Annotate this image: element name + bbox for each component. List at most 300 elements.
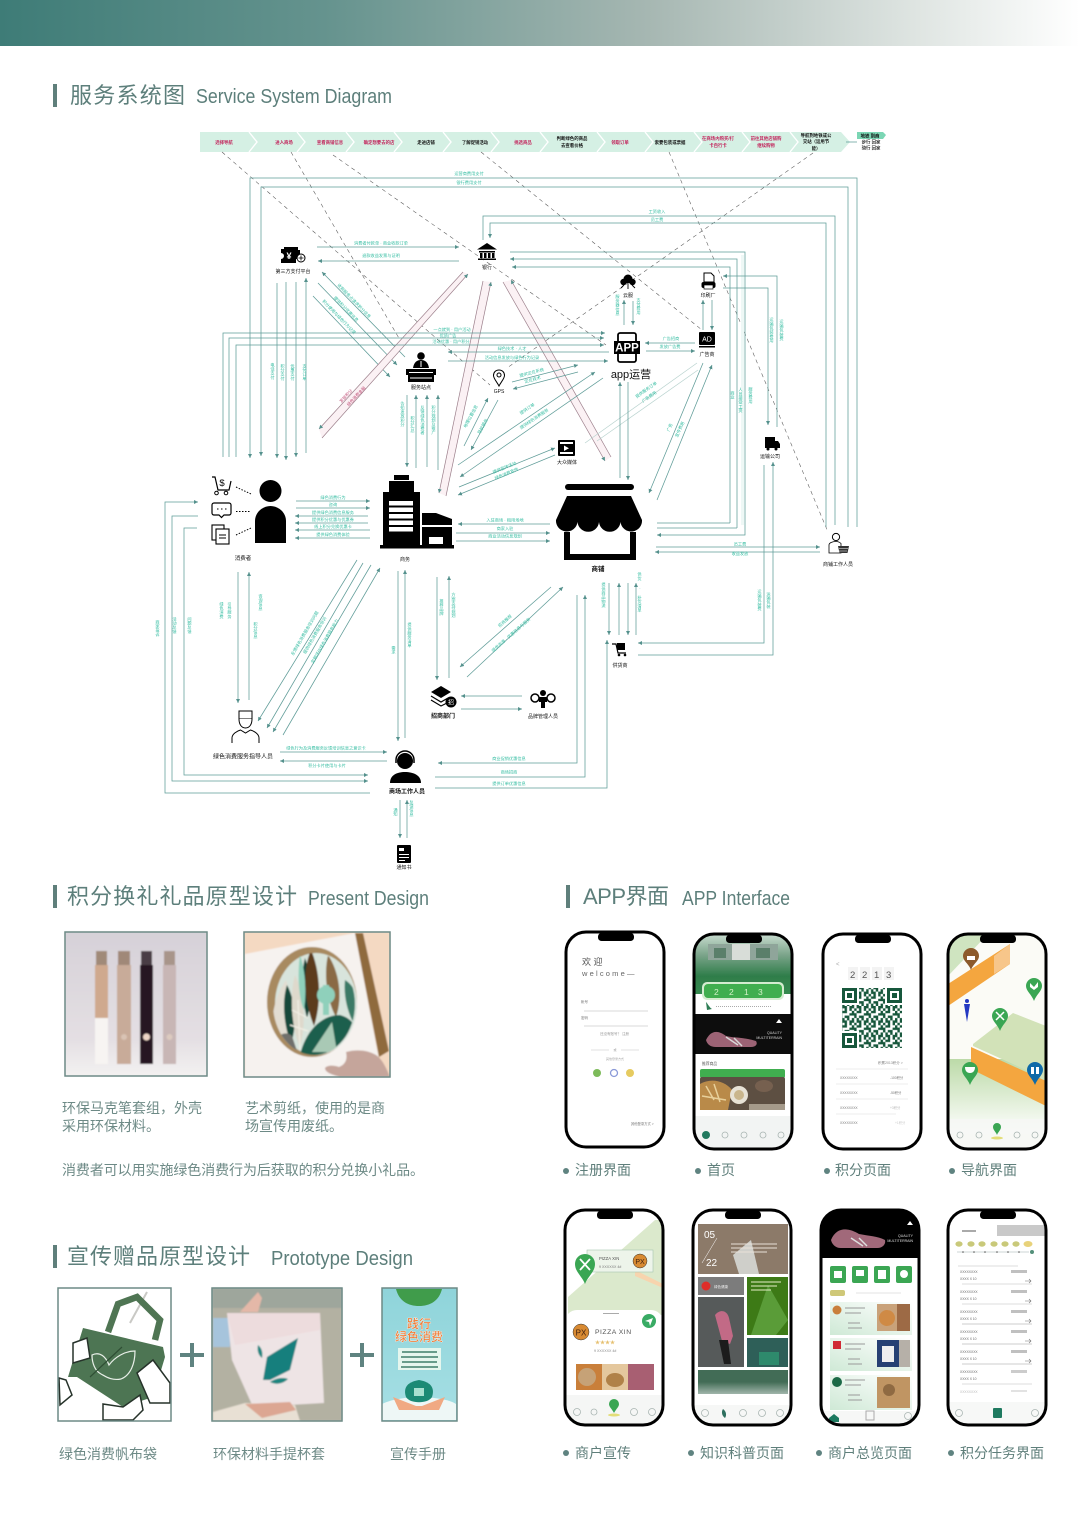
- arrows: consumer and mall: 提供积分优惠与优惠券: [312, 516, 355, 523]
- heading: present design: Present Design: [308, 888, 429, 910]
- brochure title: 践行: [407, 1316, 431, 1331]
- arrows: GPS links: 导航服务: [476, 417, 490, 435]
- icon: logistics truck: 运输公司: [760, 453, 780, 460]
- arrows: bank to right side loop: [510, 252, 754, 535]
- task rows: [958, 1266, 1032, 1394]
- task rows: XXXXXXXX: [960, 1270, 978, 1274]
- arrows: GPS links: [462, 365, 578, 450]
- arrows: shop and shop staff: 收益发放: [732, 550, 749, 557]
- arrows: consumer and green guide: 积分信息: [253, 620, 258, 639]
- arrows: shop and shop staff: 员工费: [734, 540, 746, 548]
- arrows: mall and investment dept: [437, 576, 456, 680]
- bag handles: [108, 1297, 160, 1340]
- arrows: app to service point: [448, 345, 609, 361]
- icon: app operations: [611, 333, 651, 381]
- icon: consumer group: 消费者: [235, 554, 252, 562]
- map pins: [962, 948, 1043, 1085]
- heading: prototype design: 宣传赠品原型设计: [67, 1244, 250, 1269]
- customer journey chevron band: 去查看价格: [561, 142, 584, 149]
- leaf print: [263, 1338, 298, 1380]
- arrows: shop and supplier: 提供商品物流: [601, 581, 606, 609]
- long routes: staff to bank, app and consumer: 银行费用支付: [456, 179, 482, 186]
- paper frame ring: [267, 947, 357, 1057]
- caption: merchant promotion: 商户宣传: [575, 1445, 631, 1461]
- arrows: third party pay to service point: 提供积分优惠信息: [332, 294, 360, 323]
- arrows: consumer and mall: 提供绿色消费信息服务: [312, 509, 355, 516]
- customer journey chevron band: 能）: [812, 145, 820, 151]
- phone: merchant promotion: [565, 1210, 663, 1425]
- phone: points page: XXXXXXXX: [840, 1076, 858, 1080]
- icon: mall staff with headset: 商场工作人员: [389, 788, 425, 796]
- icon: supplier cart: 供货商: [612, 662, 628, 669]
- hand: [325, 1050, 390, 1077]
- icon: bank: [477, 243, 497, 271]
- icon: shop staff: [823, 533, 853, 568]
- heading: present design: [53, 884, 429, 910]
- arrows: green guide and merchant staff: [280, 744, 387, 769]
- arrows: mall and merchant staff: 需求: [391, 645, 396, 655]
- icon: GPS pin: GPS: [494, 389, 505, 395]
- icon: documents: [212, 525, 229, 544]
- top gradient banner: [0, 0, 1080, 46]
- photo: canvas bag: [58, 1288, 171, 1421]
- arrows: mall to app and media: 提供订单: [518, 401, 536, 416]
- arrows: merchant staff to shop: [435, 595, 607, 788]
- icon: cloud server: [620, 274, 636, 299]
- arrows: service point to mall: 反馈绿色消费者: [420, 404, 426, 436]
- arrows: consumer and green guide: 引导服务: [227, 600, 232, 620]
- task rows: XXXX X 10: [960, 1357, 977, 1361]
- caption: knowledge page: 知识科普页面: [700, 1445, 784, 1461]
- category tiles: [830, 1266, 912, 1283]
- arrows: mall to app and media: [458, 372, 603, 495]
- text block: marker pen description: [62, 1100, 202, 1134]
- arrows: shop and investment dept: [460, 587, 563, 677]
- icon: investment department: 招: [448, 698, 454, 706]
- caption: brochure: 宣传手册: [390, 1446, 446, 1462]
- arrows: mall and green guide: 定期评估绿色消费服务能力: [309, 618, 340, 665]
- icon: third party payment: 第三方支付平台: [275, 268, 311, 275]
- arrows: green guide and merchant staff: 积分卡片使用与卡片: [308, 762, 346, 769]
- phone: merchant promotion: PX: [635, 1259, 645, 1266]
- arrows: mall and green guide: [258, 560, 380, 735]
- arrows: consumer and mall: 绿色消费行为: [320, 494, 346, 501]
- leaf logo: [92, 1351, 135, 1379]
- icon: chat bubble: [212, 503, 231, 518]
- arrows: app to service point: 活动信息发放与绿色行为记录: [485, 354, 539, 361]
- text block: marker pen description: 采用环保材料。: [62, 1118, 160, 1134]
- heading: service system diagram: [53, 83, 392, 108]
- arrows: consumer to merchant staff loop: 问题反馈: [187, 615, 192, 635]
- icon: third party payment: ¥: [286, 251, 292, 261]
- arrows: third party pay to consumer: 电话支付: [270, 361, 276, 381]
- phone: merchant promotion: ★★★★: [595, 1340, 615, 1346]
- phone: merchant overview: [821, 1210, 919, 1425]
- arrows: merchant staff and notice: 通知: [393, 806, 398, 818]
- text block: marker pen description: 环保马克笔套组，外壳: [62, 1100, 202, 1116]
- fern leaves: [272, 950, 360, 1055]
- phone: home screen: 推荐商品: [702, 1061, 717, 1066]
- merchant rows: [830, 1302, 912, 1410]
- icon: notice document: [396, 845, 412, 871]
- journey legend: [846, 132, 886, 152]
- icon: shop storefront: 商铺: [592, 564, 605, 573]
- arrows: bank to right side loop: 服务费用: [748, 386, 754, 405]
- arrows: printer, cloud and truck: 服务器信息: [615, 294, 620, 316]
- arrows: mall to app and media: 提供宣传活动: [491, 460, 517, 476]
- icon: consumer group: [212, 477, 286, 562]
- phone: register screen: [566, 932, 664, 1147]
- arrows: service point to mall: 积分规划及推广: [431, 404, 436, 436]
- phone: knowledge page: 05: [704, 1230, 716, 1241]
- arrows: mall and merchant staff: [391, 570, 412, 741]
- arrows: ad to shop and mall: 提供服务订单: [634, 380, 658, 400]
- arrows: bank to shop (pink): [503, 280, 611, 461]
- task rows: XXXXXXXX: [960, 1350, 978, 1354]
- icon: advertiser: AD: [702, 336, 712, 344]
- arrows: app and ad: 广告招商: [663, 335, 679, 342]
- photo: eco marker pen set: [65, 932, 207, 1076]
- arrows: consumer and green guide: [219, 572, 264, 703]
- customer journey chevron band: 前往其他店铺购: [751, 135, 782, 142]
- phone: points page: +3积分: [890, 1105, 901, 1110]
- arrows: merchant staff and notice: [393, 798, 414, 838]
- phone: home screen: QUALITY: [767, 1031, 783, 1035]
- journey legend: 步行 回家: [862, 138, 881, 146]
- arrows: shop and supplier: 供货 · 补货清单: [637, 571, 642, 614]
- arrows: merchant staff to shop: 商场招商: [501, 768, 517, 776]
- bag body: [68, 1328, 165, 1407]
- marker pens: [95, 951, 176, 1064]
- arrows: mall and green guide: 反馈绿色消费服务培训问题: [289, 609, 321, 657]
- photo: cup sleeve: [212, 1288, 342, 1421]
- arrows: mall and green guide: 提供绿色消费服务培训: [301, 615, 328, 655]
- long routes: staff to bank, app and consumer: 工资收入: [649, 208, 666, 215]
- arrows: mall and shop: 商业活动信息规划: [488, 532, 522, 540]
- arrows: mall and shop: 入驻商场 · 租用场地: [486, 516, 524, 524]
- QR code: [842, 988, 902, 1048]
- phone: points page: -50积分: [890, 1090, 902, 1095]
- arrows: app to service point: 绿色技术 · 人才: [498, 345, 526, 352]
- icon: mall building: 商务: [400, 556, 410, 563]
- arrows: third party pay to bank: [317, 240, 459, 261]
- arrows: mall and shop: [456, 516, 550, 541]
- arrows: third party pay to consumer: 支付订单: [302, 362, 308, 382]
- icon: mall building: [380, 475, 454, 563]
- arrows: third party pay to consumer: 优惠支付: [290, 362, 296, 382]
- arrows: service point to mall: 积分汇总: [410, 414, 416, 433]
- points bar: 2: [729, 987, 734, 997]
- text block: paper cut description: [245, 1100, 385, 1134]
- arrows: bank to consumer (pink): 发放积分: [338, 387, 355, 404]
- brochure text card: [398, 1348, 441, 1370]
- arrows: third party pay to service point: [313, 272, 405, 377]
- panel: service system diagram: [155, 132, 886, 871]
- arrows: truck to supplier: [638, 462, 773, 655]
- icon: mass media video: [557, 440, 577, 466]
- arrows: truck to supplier: 运输包装费: [757, 588, 762, 612]
- icon: cloud server: 云服: [623, 293, 633, 299]
- icon: app operations: APP: [615, 342, 639, 354]
- phone: register screen: 或: [613, 1047, 617, 1052]
- customer journey chevron band: 选择导航: [215, 139, 233, 146]
- phone: home screen: [694, 934, 792, 1149]
- arrows: app and ad: 发放广告费: [660, 343, 680, 350]
- arrows: consumer to app: 活动优惠 · 用户积分: [432, 338, 470, 345]
- task rows: XXXXXXXX: [960, 1370, 978, 1374]
- caption: home: 首页: [707, 1162, 735, 1178]
- points bar: [702, 982, 784, 1000]
- arrows: shop and shop staff: [655, 540, 820, 557]
- customer journey chevron band: 继续购物: [757, 142, 775, 149]
- icon: investment department: 招商部门: [431, 712, 455, 720]
- arrows: mall and investment dept: 方案支持规划: [451, 591, 456, 618]
- arrows: consumer to app: 优质广告: [440, 332, 456, 339]
- long routes: staff to bank, app and consumer: [250, 170, 857, 527]
- arrows: mall to app and media: 绿色消费宣传: [493, 466, 519, 482]
- caption: merchant overview: 商户总览页面: [828, 1445, 912, 1461]
- arrows: consumer to merchant staff loop: [155, 502, 370, 793]
- icon: mall staff with headset: [389, 751, 425, 796]
- icon: app operations: app运营: [611, 367, 651, 381]
- task rows: XXXX X 10: [960, 1317, 977, 1321]
- icon: logistics truck: [760, 437, 780, 460]
- arrows: printer, cloud and truck: 支付费用: [636, 296, 642, 316]
- phone: merchant overview: QUALITY: [898, 1234, 914, 1238]
- customer journey chevron band: [200, 132, 850, 152]
- icon: supplier cart: [612, 643, 628, 669]
- points bar: 1: [744, 987, 749, 997]
- journey legend: 地铁 到商: [861, 132, 880, 140]
- phone: points task screen: [948, 1210, 1046, 1425]
- arrows: GPS links: 提供定位系统: [519, 366, 545, 379]
- coin row: [955, 1241, 1032, 1247]
- plus sign: [350, 1343, 374, 1367]
- phone: home screen: MULTITERRAIN: [756, 1036, 782, 1040]
- arrows: ad to shop and mall: 广告: [665, 422, 675, 433]
- phone: points page: 1: [874, 970, 879, 981]
- task rows: XXXXXXXX: [960, 1290, 978, 1294]
- phone: knowledge page: [693, 1210, 791, 1425]
- customer journey chevron band: 走进店铺: [417, 139, 435, 146]
- points bar: 3: [758, 987, 763, 997]
- photo: paper cut art: [244, 932, 390, 1077]
- arrows: third party pay to consumer: 积分支付: [280, 362, 286, 382]
- icon: consumer figure: [255, 480, 286, 543]
- icon: shop storefront: [556, 484, 642, 573]
- phone: register screen: 密码: [581, 1015, 588, 1020]
- icon: notice document: 通知书: [396, 864, 412, 871]
- phone: points page: <: [836, 962, 840, 968]
- arrows: mall and shop: 商家入驻: [497, 525, 514, 532]
- phone: points page: XXXXXXXX: [840, 1091, 858, 1095]
- photo: promotional brochure: 绿色消费: [395, 1329, 443, 1344]
- photo: promotional brochure: [382, 1288, 457, 1421]
- icon: mass media video: 大众媒体: [557, 459, 577, 466]
- arrows: consumer to merchant staff loop: 活动反馈: [172, 615, 178, 635]
- phone: points page: XXXXXXXX: [840, 1121, 858, 1125]
- text block: points exchange note: 消费者可以用实施绿色消费行为后获取的积分兑换小礼品。: [62, 1162, 424, 1178]
- icon: shopping cart: $: [219, 478, 225, 489]
- arrows: consumer to merchant staff loop: 商家投诉: [155, 618, 160, 638]
- arrows: printer, cloud and truck: 运输包装费: [779, 318, 784, 342]
- arrows: bank to consumer (pink): 绿色消费金融: [345, 384, 368, 408]
- customer journey chevron band: 在商场内购买/打: [702, 135, 735, 142]
- journey legend: 骑行 回家: [862, 144, 881, 152]
- caption: cup sleeve: 环保材料手提杯套: [213, 1446, 325, 1462]
- phone: points page: 积累2013积分 >: [878, 1060, 903, 1065]
- plus sign: [180, 1343, 204, 1367]
- icon: printer: [700, 273, 716, 299]
- icon: bank: 银行: [482, 264, 492, 271]
- customer journey chevron band: 查看商铺信息: [317, 139, 344, 146]
- phone: points page: -100积分: [890, 1075, 904, 1080]
- arrows: third party pay to service point: 积分使用与绿色行为记录: [321, 298, 358, 336]
- arrows: consumer and mall: 提供绿色消费体验: [316, 531, 351, 538]
- text block: paper cut description: 艺术剪纸，使用的是商: [245, 1100, 385, 1116]
- arrows: mall and investment dept: 推荐品牌: [440, 597, 444, 617]
- arrows: mall and merchant staff: 提供服务清单: [407, 621, 412, 649]
- heading: prototype design: [53, 1244, 413, 1270]
- task rows: XXXXXXXX: [960, 1310, 978, 1314]
- customer journey chevron band: 领取订单: [611, 139, 629, 146]
- points bar: 2: [714, 987, 719, 997]
- arrows: ad to shop and mall: 广告费用: [640, 389, 658, 404]
- hands and earth: [382, 1380, 456, 1420]
- arrows: consumer to app: [223, 326, 605, 457]
- phone: register screen: 其他登录方式 >: [631, 1121, 654, 1126]
- customer journey chevron band: 进入商场: [275, 139, 293, 146]
- task rows: XXXX X 10: [960, 1297, 977, 1301]
- arrows: app and shop: [620, 382, 628, 480]
- arrows: consumer and green guide: 咨询信息: [258, 592, 264, 611]
- icon: advertiser: 广告商: [699, 351, 715, 358]
- customer journey chevron band: 卡自行卡: [709, 142, 727, 149]
- phone: knowledge page: 22: [706, 1258, 718, 1269]
- arrows: ad to shop and mall: 宣传费用: [673, 420, 686, 438]
- arrows: shop and supplier: [601, 571, 642, 635]
- phone: points page: 2: [850, 970, 855, 981]
- phone: points page: +1积分: [895, 1120, 906, 1125]
- arrows: consumer and mall: 线上积分兑换优惠卡: [314, 523, 352, 530]
- text block: paper cut description: 场宣传用废纸。: [245, 1118, 343, 1134]
- arrows: consumer and green guide: 绿色消费: [219, 600, 224, 620]
- phone: register screen: 还没有账号？ 注册: [600, 1031, 629, 1036]
- arrows: printer, cloud and truck: 运输包装费用: [769, 316, 774, 344]
- heading: prototype design: Prototype Design: [271, 1248, 413, 1270]
- customer journey chevron band: 交站（运用节: [803, 138, 830, 145]
- heading: app interface: APP Interface: [682, 888, 790, 910]
- heading: service system diagram: Service System Diagram: [196, 86, 392, 108]
- arrows: investment and brand staff: [461, 696, 522, 709]
- arrows: third party pay to bank: 退款收益发票与证明: [362, 252, 400, 259]
- customer journey chevron band: 了解促销活动: [462, 139, 489, 146]
- globe: [396, 1289, 442, 1306]
- customer journey chevron band: 确定想要去的店: [364, 139, 395, 146]
- arrows: ad to shop and mall: [585, 363, 712, 500]
- phone: points page: 3: [886, 970, 891, 981]
- arrows: mall to app and media: 提供绿色消费服务: [518, 406, 551, 431]
- arrows: bank to right side loop: 商业: [730, 389, 736, 400]
- arrows: merchant staff to shop: 商业促销优惠信息: [492, 755, 526, 762]
- arrows: merchant staff to shop: 提供订单优惠信息: [492, 780, 526, 787]
- icon: service point: [406, 352, 436, 391]
- arrows: truck to supplier: 运输包装: [766, 590, 772, 610]
- icon: printer: 印刷厂: [700, 292, 716, 299]
- arrows: third party pay to consumer: [270, 278, 308, 460]
- phone: merchant overview: MULTITERRAIN: [887, 1239, 913, 1243]
- arrows: service point to mall: [400, 395, 438, 470]
- phone: merchant promotion: PX: [576, 1328, 587, 1338]
- dashed touchpoint connectors: [222, 152, 828, 532]
- strap line: [130, 1292, 147, 1323]
- icon: brand manager: 品牌管理人员: [528, 713, 558, 720]
- phone: knowledge page: 绿色健康: [714, 1284, 728, 1289]
- arrows: third party pay to service point: 收到服务点请求积分信息: [336, 282, 373, 320]
- phone: register screen: 其他登录方式: [606, 1056, 624, 1061]
- arrows: bank to consumer (pink): [319, 272, 468, 438]
- heading: app interface: APP界面: [583, 884, 669, 909]
- arrows: bank to right side loop: 人员接受工资: [738, 387, 744, 414]
- long routes: staff to bank, app and consumer: 运营商费用支付: [454, 170, 484, 177]
- icon: third party payment: [275, 247, 311, 275]
- customer journey chevron band: 导航到地铁或公: [801, 132, 832, 139]
- long routes: staff to bank, app and consumer: 员工费: [651, 216, 663, 223]
- icon: shop staff: 商铺工作人员: [823, 561, 853, 568]
- icon: service point: 服务站点: [411, 384, 431, 391]
- phone: merchant promotion: PIZZA XIN: [599, 1256, 619, 1261]
- task rows: XXXXXXXX: [960, 1330, 978, 1334]
- icon: green consumption guide: 绿色消费服务指导人员: [213, 752, 273, 760]
- arrows: printer, cloud and truck: [615, 276, 784, 427]
- phone: merchant promotion: PIZZA XIN: [595, 1329, 632, 1336]
- task rows: XXXX X 10: [960, 1377, 977, 1381]
- icon: GPS pin: [494, 370, 505, 395]
- arrows: green guide and merchant staff: 绿色行为及消费服务反馈培训信息之意识卡: [286, 744, 366, 752]
- arrows: GPS links: 定位技术: [524, 374, 542, 385]
- task rows: XXXXXXXX: [960, 1390, 978, 1394]
- arrows: merchant staff and notice: 反馈信息: [409, 798, 414, 817]
- customer journey chevron band: 判断绿色的商品: [557, 135, 588, 142]
- caption: points tasks: 积分任务界面: [960, 1445, 1044, 1461]
- task rows: XXXX X 10: [960, 1277, 977, 1281]
- phone: merchant promotion: 9 XXXXXX 4#: [599, 1265, 621, 1269]
- arrows: app and ad: [645, 335, 695, 351]
- icon: green consumption guide: [213, 711, 273, 760]
- icon: brand manager: [528, 690, 558, 720]
- arrows: GPS links: 地理位置信息: [462, 404, 480, 429]
- caption: register: 注册界面: [575, 1162, 631, 1178]
- heading: app interface: [566, 884, 790, 910]
- customer journey chevron band: 挑选商品: [514, 139, 532, 146]
- arrows: consumer and mall: [295, 494, 370, 538]
- icon: advertiser: [699, 332, 715, 358]
- arrows: consumer and mall: 咨询: [329, 501, 337, 508]
- arrows: service point to mall: 告知发放积分: [400, 400, 406, 428]
- phone: register screen: welcome—: [581, 969, 637, 978]
- arrows: shop and investment dept: 提供资源 · 优惠信息与服务: [490, 615, 533, 654]
- phone: navigation screen: [948, 934, 1046, 1149]
- arrows: bank to mall (pink): [439, 281, 491, 496]
- phone: points page: [823, 934, 921, 1149]
- phone: merchant promotion: 9 XXXXXX 4#: [594, 1349, 616, 1353]
- phone: register screen: 帐号: [581, 999, 588, 1004]
- phone: points page: XXXXXXXX: [840, 1106, 858, 1110]
- caption: points page: 积分页面: [835, 1162, 891, 1178]
- icon: investment department: [431, 686, 456, 720]
- heading: service system diagram: 服务系统图: [70, 83, 185, 108]
- arrows: consumer to app: 一点就到 · 用户活动: [433, 326, 471, 333]
